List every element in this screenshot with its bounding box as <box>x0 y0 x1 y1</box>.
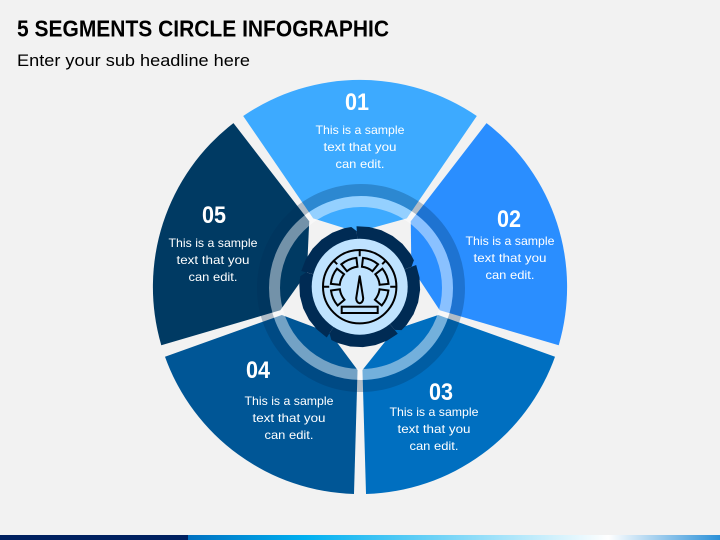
panel: segment 03 <box>298 263 576 523</box>
icon: speedometer gauge <box>323 250 396 323</box>
panel: segment 01: 01 <box>345 89 369 116</box>
panel: segment 04 <box>144 263 422 523</box>
panel: segment 05: text that you <box>176 253 250 267</box>
title: 5 SEGMENTS CIRCLE INFOGRAPHIC <box>17 16 389 42</box>
panel: segment 05: This is a sample <box>168 236 258 250</box>
translucent rings <box>263 190 459 386</box>
panel: segment 01: This is a sample <box>316 123 405 137</box>
panel: segment 02: can edit. <box>486 268 534 282</box>
panel: segment 03: 03 <box>429 379 453 406</box>
panel: segment 01 <box>243 80 477 232</box>
panel: segment 02: 02 <box>497 206 521 233</box>
panel: segment 05: 05 <box>202 202 226 229</box>
panel: segment 03: text that you <box>398 422 470 436</box>
panel: segment 03: can edit. <box>410 439 458 453</box>
panel: segment 05 <box>127 112 344 381</box>
panel: segment 04: This is a sample <box>244 394 334 408</box>
panel: segment 01: text that you <box>324 140 396 154</box>
center disc <box>312 239 408 335</box>
panel: segment 02 <box>376 112 593 381</box>
panel: segment 04: 04 <box>246 357 271 384</box>
panel: segment 02: text that you <box>474 251 546 265</box>
footer bar dark <box>0 535 188 540</box>
panel: segment 04: text that you <box>252 411 326 425</box>
panel: segment 02: This is a sample <box>466 234 555 248</box>
panel: segment 04: can edit. <box>264 428 314 442</box>
panel: segment 03: This is a sample <box>390 405 479 419</box>
subtitle: Enter your sub headline here <box>17 51 250 70</box>
panel: segment 05: can edit. <box>188 270 238 284</box>
sawtooth dark ring <box>280 216 434 367</box>
panel: segment 01: can edit. <box>336 157 384 171</box>
footer bar gradient <box>188 535 720 540</box>
